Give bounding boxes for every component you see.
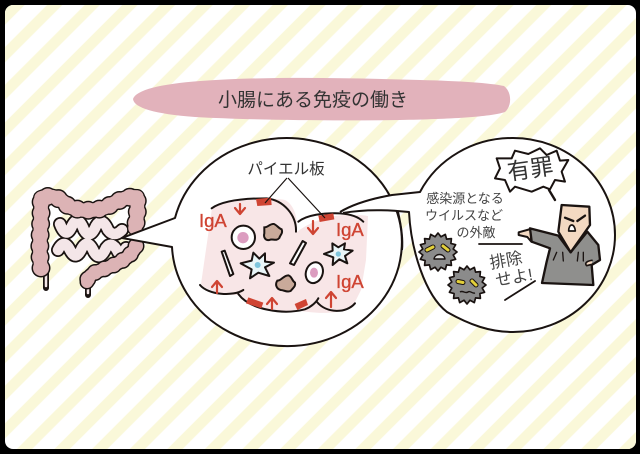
speech burst: guilty <box>495 148 568 200</box>
icon: large intestine and small intestine <box>40 196 137 295</box>
colon <box>40 196 137 295</box>
icon: virus 2 <box>448 266 486 304</box>
text: infection sources: 感染源となる <box>426 191 504 206</box>
title banner: 小腸にある免疫の働き <box>218 89 408 111</box>
IgA labels: IgA <box>336 271 364 292</box>
title banner <box>133 78 510 120</box>
callout: immune tissue circle <box>122 138 402 346</box>
tissue outline <box>200 198 363 312</box>
text: infection sources: の外敵 <box>456 225 496 240</box>
text: eliminate: せよ! <box>494 266 534 290</box>
text: infection sources: ウイルスなど <box>425 208 503 223</box>
speech burst: guilty: 有罪 <box>506 153 555 185</box>
immune cells <box>222 224 353 292</box>
IgA labels: IgA <box>199 210 227 231</box>
label: Peyer's patches <box>247 160 325 218</box>
small intestine <box>58 221 126 256</box>
text: eliminate <box>479 244 535 300</box>
Peyer's patches <box>246 198 334 310</box>
label: Peyer's patches: パイエル板 <box>247 160 325 178</box>
big circle right edge below the band <box>398 212 402 250</box>
icon: virus 1 <box>419 233 457 271</box>
icon: pointing judge <box>519 205 600 285</box>
text: eliminate: 排除 <box>488 248 524 273</box>
pink tissue area <box>201 199 368 313</box>
IgA labels: IgA <box>336 219 364 240</box>
IgA labels <box>199 210 364 292</box>
text: infection sources <box>425 191 504 240</box>
callout: courtroom circle <box>340 138 615 332</box>
red arrows <box>212 204 336 309</box>
